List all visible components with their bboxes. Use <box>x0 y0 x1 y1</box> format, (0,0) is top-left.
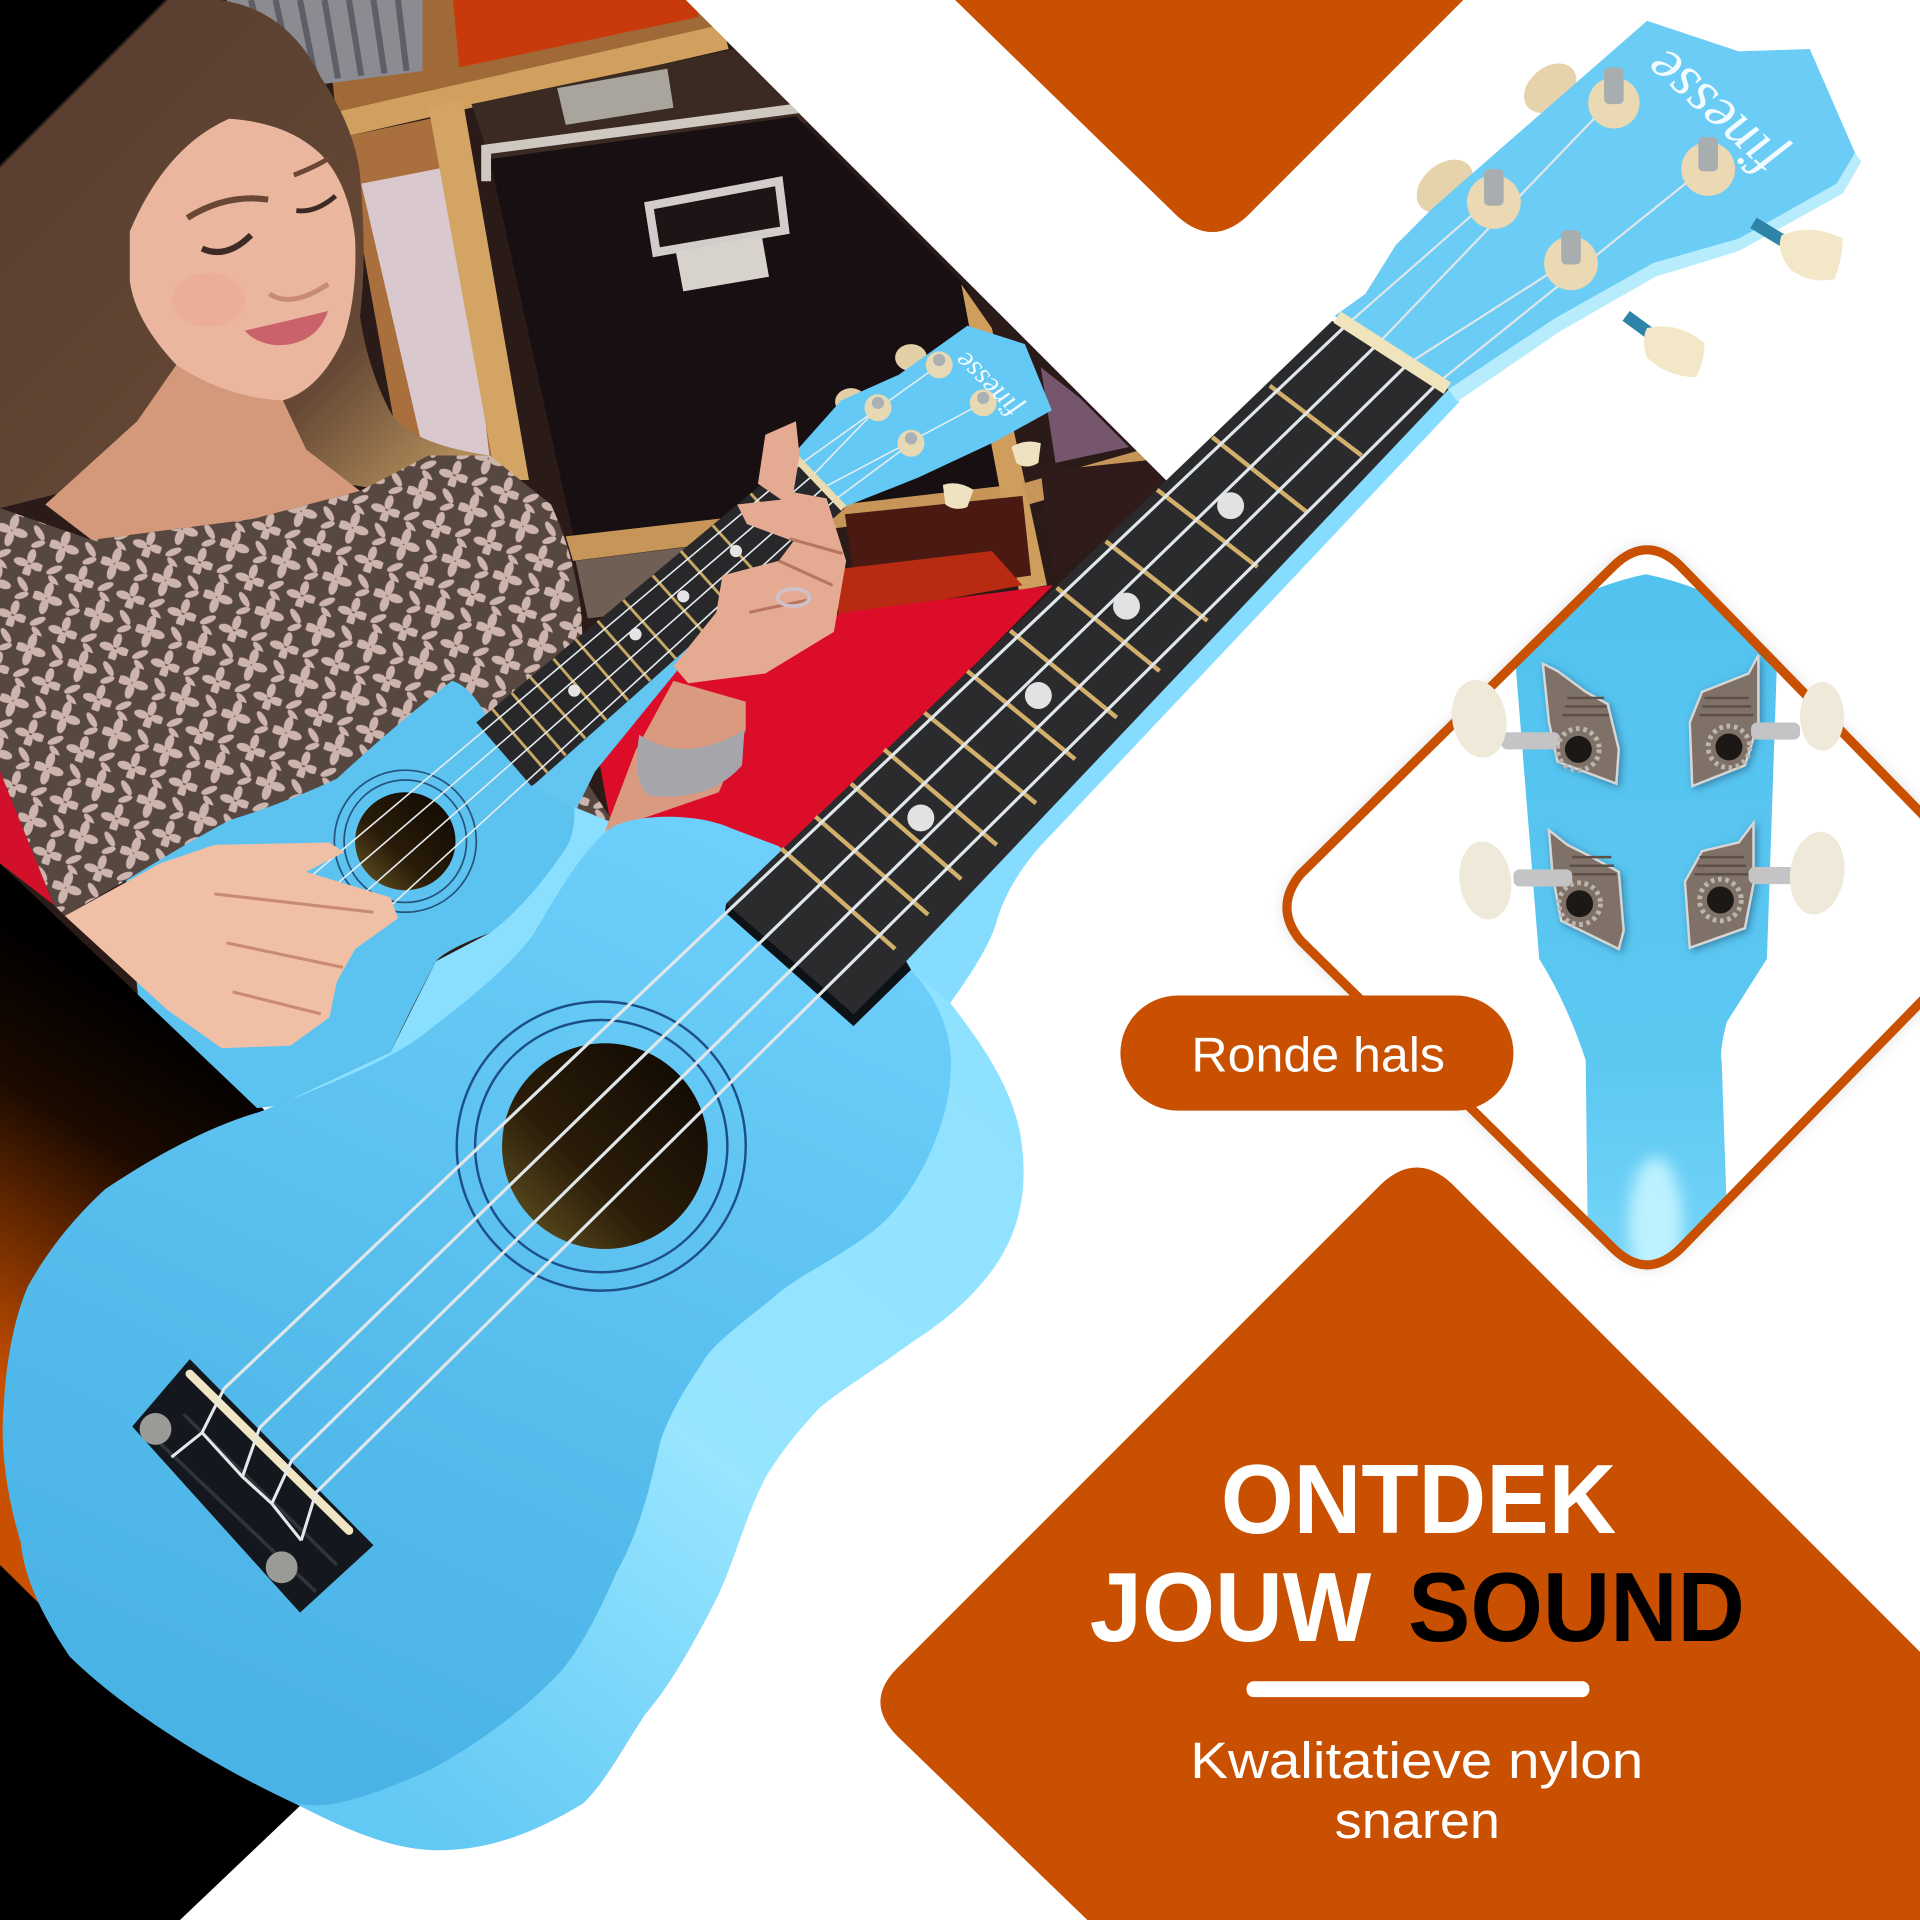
fretting hand and arm <box>605 421 846 831</box>
ukulele sound hole <box>502 1043 708 1249</box>
ukulele neck side <box>796 389 1460 1003</box>
fretboard end shadow <box>725 904 911 1026</box>
ukulele bridge <box>132 1359 373 1613</box>
ukulele frets <box>781 386 1362 949</box>
headline: ONTDEK <box>1221 1444 1616 1554</box>
ukulele rosette <box>457 1002 746 1291</box>
woman lace dress <box>0 456 612 916</box>
red cloth <box>600 585 1053 848</box>
small ukulele sound hole <box>355 792 456 890</box>
small ukulele headstock <box>792 326 1052 508</box>
small ukulele dots <box>568 545 742 697</box>
tuner top left <box>1446 664 1619 784</box>
strumming hand <box>65 842 398 1048</box>
orange diamond with headline <box>880 1168 1920 1920</box>
headline: JOUW <box>1090 1552 1372 1662</box>
small ukulele nut <box>795 457 844 508</box>
ukulele headstock <box>1335 21 1855 389</box>
gradient panel left <box>0 863 276 1714</box>
ukulele back tuner knobs <box>1406 53 1586 223</box>
callout shadow <box>1287 550 1920 1265</box>
woman hair <box>0 0 490 508</box>
small ukulele rosette <box>334 770 476 912</box>
headline <box>1090 1444 1745 1662</box>
label pill: Ronde hals <box>1120 996 1513 1111</box>
black corner top left <box>0 0 165 165</box>
tuner bottom right <box>1685 823 1850 948</box>
ukulele strings <box>224 98 1708 1493</box>
small ukulele logo: finesse <box>948 345 1027 424</box>
callout inner background <box>1287 550 1920 1265</box>
ring <box>778 589 809 606</box>
ukulele headstock edge <box>1449 153 1861 402</box>
ukulele fret dots <box>907 492 1244 831</box>
small ukulele fretboard <box>476 456 845 786</box>
ukulele body side <box>295 971 1024 1850</box>
small ukulele side <box>282 807 609 1104</box>
headline diamond <box>880 1168 1920 1920</box>
small ukulele tuner knobs back <box>835 344 927 406</box>
orange diamond top <box>955 0 1463 232</box>
small ukulele body <box>126 681 574 1133</box>
tuner bottom left <box>1454 830 1624 949</box>
subtitle: snaren <box>1335 1791 1500 1849</box>
subtitle: Kwalitatieve nylon <box>1190 1731 1643 1789</box>
black panel bottom left <box>0 1565 306 1920</box>
ukulele headstock logo: finesse <box>1632 36 1794 192</box>
ukulele nut <box>1337 317 1447 388</box>
bracelets <box>637 730 744 797</box>
label pill: Ronde hals: Ronde hals <box>1191 1028 1445 1082</box>
tuner top right <box>1690 655 1844 786</box>
small ukulele strings <box>312 372 972 905</box>
small ukulele tuners <box>864 351 1041 509</box>
callout border <box>1287 550 1920 1265</box>
subtitle <box>1190 1731 1643 1849</box>
headline divider <box>1247 1681 1589 1697</box>
photo backdrop <box>0 0 1224 1163</box>
headline: SOUND <box>1408 1552 1745 1662</box>
woman face <box>130 119 355 400</box>
small ukulele frets <box>492 493 801 773</box>
small ukulele <box>126 326 1052 1133</box>
photo: woman playing ukulele <box>0 0 1224 1163</box>
headstock back <box>1516 574 1777 1292</box>
ukulele tuners <box>1467 67 1843 377</box>
small ukulele neck side <box>532 646 689 808</box>
callout: rounded neck close-up <box>1287 550 1920 1292</box>
woman neck and chest <box>45 365 360 540</box>
ukulele top face <box>3 817 951 1805</box>
ukulele fretboard <box>726 321 1449 1014</box>
